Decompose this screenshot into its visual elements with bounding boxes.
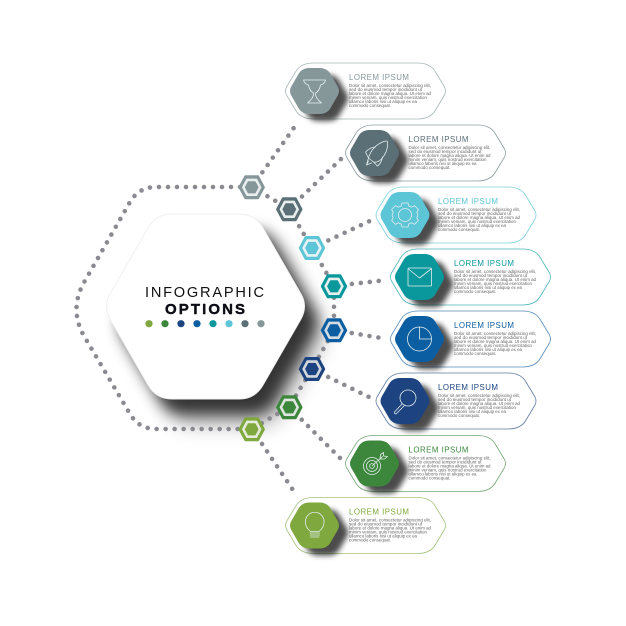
body text	[438, 393, 520, 418]
body text: commodo consequat.	[454, 351, 496, 356]
body text: minim veniam, quis nostrud exercitation	[349, 530, 427, 534]
body text: ullamco laboris nisi ut aliquip ex ea	[454, 285, 522, 290]
body text: labore et dolore magna aliqua. Ut enim ad	[349, 526, 431, 530]
body text: sed do eiusmod tempor incididunt ut	[454, 335, 528, 340]
body text	[454, 269, 536, 294]
body text: Dolor sit amet, consectetur adipiscing elit,	[349, 83, 431, 88]
body text: commodo consequat.	[408, 165, 450, 170]
body text	[408, 145, 491, 170]
icon: light bulb	[305, 512, 324, 537]
node: cyan	[300, 237, 324, 259]
body text: sed do eiusmod tempor incididunt ut	[408, 149, 482, 154]
body text: Dolor sit amet, consectetur adipiscing elit,	[408, 456, 490, 460]
card 6: magnifier	[376, 373, 536, 431]
body text: sed do eiusmod tempor incididunt ut	[438, 211, 512, 216]
heading: LOREM IPSUM	[408, 446, 468, 454]
body text: sed do eiusmod tempor incididunt ut	[408, 460, 482, 464]
card 7: target	[346, 436, 506, 494]
body text: labore et dolore magna aliqua. Ut enim ad	[408, 464, 491, 468]
title line one: INFOGRAPHIC	[145, 285, 264, 301]
icon: rocket	[366, 141, 388, 166]
heading: LOREM IPSUM	[454, 321, 514, 330]
body text: ullamco laboris nisi ut aliquip ex ea	[438, 223, 506, 228]
card 2: rocket	[346, 125, 506, 183]
body text: labore et dolore magna aliqua. Ut enim ad	[408, 153, 491, 158]
node: navy	[300, 358, 324, 380]
dotted connectors	[76, 122, 387, 496]
body text: ullamco laboris nisi ut aliquip ex ea	[349, 534, 417, 538]
body text: ullamco laboris nisi ut aliquip ex ea	[408, 472, 477, 476]
body text: commodo consequat.	[349, 103, 391, 108]
body text: sed do eiusmod tempor incididunt ut	[438, 397, 512, 402]
body text: minim veniam, quis nostrud exercitation	[408, 157, 487, 162]
body text	[408, 456, 491, 480]
body text: commodo consequat.	[438, 413, 480, 418]
central hexagon	[106, 214, 304, 399]
heading: LOREM IPSUM	[349, 508, 409, 516]
body text: ullamco laboris nisi ut aliquip ex ea	[438, 409, 506, 414]
node: green	[277, 396, 301, 418]
body text: minim veniam, quis nostrud exercitation	[438, 219, 516, 224]
icon: target	[364, 452, 388, 474]
card 5: pie	[390, 311, 550, 369]
heading: LOREM IPSUM	[438, 383, 498, 392]
card 8: bulb	[286, 498, 446, 556]
body text: commodo consequat.	[454, 289, 496, 294]
body text: minim veniam, quis nostrud exercitation	[349, 95, 427, 100]
heading: LOREM IPSUM	[438, 197, 498, 206]
body text: labore et dolore magna aliqua. Ut enim ad	[454, 339, 536, 344]
body text: sed do eiusmod tempor incididunt ut	[349, 87, 423, 92]
body text: minim veniam, quis nostrud exercitation	[454, 343, 532, 348]
body text: labore et dolore magna aliqua. Ut enim ad	[438, 401, 520, 406]
body text	[349, 518, 431, 542]
heading: LOREM IPSUM	[454, 259, 514, 268]
heading: LOREM IPSUM	[408, 135, 468, 144]
icon: envelope	[408, 268, 432, 286]
body text	[438, 207, 520, 232]
body text: commodo consequat.	[438, 227, 480, 232]
node: slate	[277, 198, 301, 220]
body text: sed do eiusmod tempor incididunt ut	[349, 522, 423, 526]
body text: ullamco laboris nisi ut aliquip ex ea	[349, 99, 417, 104]
body text: minim veniam, quis nostrud exercitation	[408, 468, 487, 472]
body text: Dolor sit amet, consectetur adipiscing elit,	[438, 393, 520, 398]
icon: gear	[392, 203, 418, 227]
main hexagon shadow	[118, 229, 324, 425]
body text: sed do eiusmod tempor incididunt ut	[454, 273, 528, 278]
body text: ullamco laboris nisi ut aliquip ex ea	[408, 161, 477, 166]
icon: pie chart	[408, 327, 432, 351]
colour dots row	[145, 320, 265, 327]
icon: trophy	[304, 80, 326, 103]
title line two: OPTIONS	[165, 301, 245, 318]
body text: minim veniam, quis nostrud exercitation	[438, 405, 516, 410]
body text: labore et dolore magna aliqua. Ut enim ad	[454, 277, 536, 282]
body text	[454, 331, 536, 356]
node: teal	[322, 276, 346, 297]
body text: labore et dolore magna aliqua. Ut enim ad	[349, 91, 431, 96]
card 1: trophy	[286, 63, 446, 121]
card 4: mail	[390, 249, 550, 307]
card 3: gear	[376, 187, 536, 245]
body text: Dolor sit amet, consectetur adipiscing elit,	[349, 518, 431, 522]
node: blue	[322, 320, 346, 341]
body text: labore et dolore magna aliqua. Ut enim ad	[438, 215, 520, 220]
body text: commodo consequat.	[408, 476, 450, 480]
body text: Dolor sit amet, consectetur adipiscing elit,	[454, 269, 536, 274]
body text: Dolor sit amet, consectetur adipiscing elit,	[438, 207, 520, 212]
body text: Dolor sit amet, consectetur adipiscing elit,	[454, 331, 536, 336]
body text	[349, 83, 431, 108]
body text: Dolor sit amet, consectetur adipiscing elit,	[408, 145, 490, 150]
icon: magnifier	[394, 390, 416, 414]
body text: ullamco laboris nisi ut aliquip ex ea	[454, 347, 522, 352]
node: gray	[240, 176, 264, 198]
body text: minim veniam, quis nostrud exercitation	[454, 281, 532, 286]
body text: commodo consequat.	[349, 538, 391, 542]
node: light green	[240, 418, 264, 440]
heading: LOREM IPSUM	[349, 73, 409, 82]
